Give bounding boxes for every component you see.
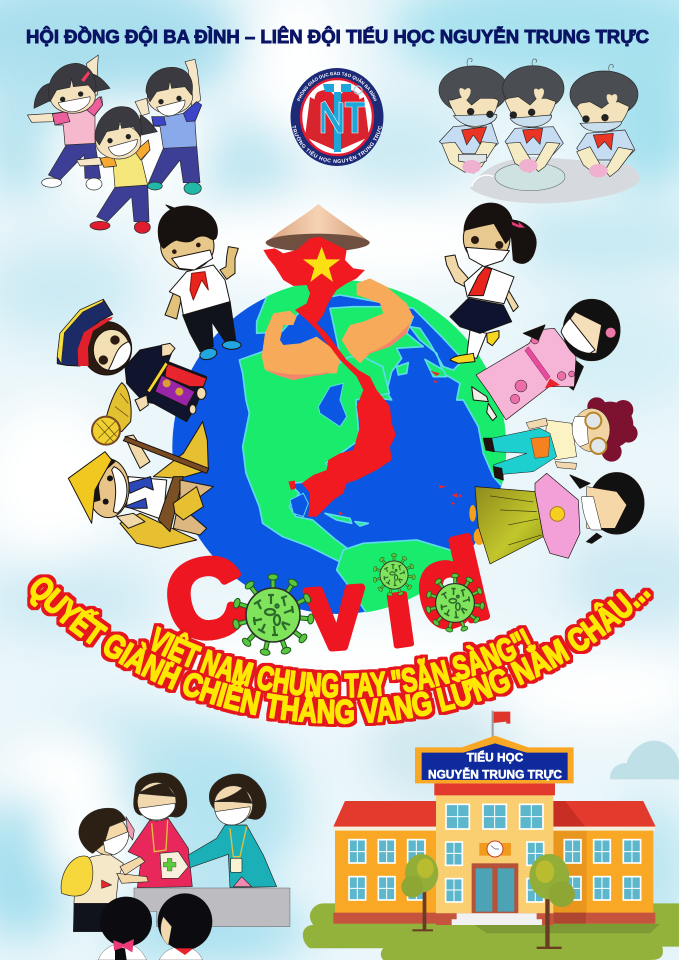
virus large [232, 574, 314, 656]
sanitizer bottle [160, 852, 188, 878]
boy 1 [439, 58, 508, 173]
boy 2 [503, 59, 564, 172]
slogan line one: VIỆT NAM CHUNG TAY "SẴN SÀNG"! [149, 623, 534, 701]
boy 3 [570, 64, 638, 177]
kid: yellow shirt [77, 107, 157, 233]
kids exercising [27, 55, 202, 233]
sign board: NGUYỄN TRUNG TRỰC [428, 767, 562, 782]
word COVID: d [404, 516, 499, 653]
globe [172, 277, 523, 617]
virus small [373, 554, 415, 596]
title: HỘI ĐỒNG ĐỘI BA ĐÌNH – LIÊN ĐỘI TIỂU HỌC NGUYỄN TRUNG TRỰC [26, 26, 649, 47]
word COVID: V [305, 569, 367, 667]
sink counter [470, 157, 640, 203]
student: back of head right [158, 893, 212, 960]
school logo [290, 68, 384, 166]
school building [303, 711, 679, 960]
cloud [610, 741, 679, 779]
ethnic minority girl [57, 299, 207, 422]
girl in pink dress [472, 299, 620, 421]
right tree [529, 854, 575, 949]
pioneer girl [445, 203, 536, 363]
boy with fishing net [68, 383, 213, 548]
girl in pink shirt and olive skirt [469, 473, 644, 564]
kid: blue shirt [135, 59, 202, 194]
globe with Vietnam map [172, 204, 523, 617]
word COVID: C [155, 531, 257, 666]
gold star [303, 247, 340, 282]
boy with backpack [61, 808, 148, 932]
school logo: PHÒNG GIÁO DỤC ĐÀO TẠO QUẬN BA ĐÌNH [297, 71, 377, 102]
door and steps [452, 863, 542, 925]
teacher in red [126, 773, 192, 888]
gray table [134, 888, 290, 927]
boy with curly red hair and glasses [483, 397, 638, 480]
pioneer boy [158, 205, 241, 361]
kid: pink shirt [27, 55, 110, 190]
left tree [401, 854, 438, 931]
word COVID: I [382, 577, 420, 663]
conical hat [266, 204, 370, 252]
sign board [415, 736, 574, 783]
flag [492, 711, 510, 737]
school logo: TRƯỜNG TIỂU HỌC NGUYỄN TRUNG TRỰC [292, 125, 382, 163]
left wing [335, 827, 437, 923]
right wing [553, 827, 653, 923]
clock [479, 841, 511, 857]
sign board: TIỂU HỌC [467, 749, 523, 764]
virus medium [425, 573, 485, 633]
grass [303, 903, 679, 960]
teachers and students [61, 773, 290, 960]
Vietnam map [263, 237, 396, 517]
central block [436, 795, 553, 915]
muscular arms [262, 278, 413, 380]
student: back of head left [98, 897, 152, 960]
word COVID [155, 516, 499, 667]
kids washing hands [439, 58, 640, 203]
curved slogan [27, 574, 654, 728]
windows [349, 804, 641, 902]
teacher in teal [188, 774, 277, 888]
slogan line two: QUYẾT GIÀNH CHIẾN THẮNG VANG LỪNG NĂM CHÂU... [27, 574, 654, 728]
